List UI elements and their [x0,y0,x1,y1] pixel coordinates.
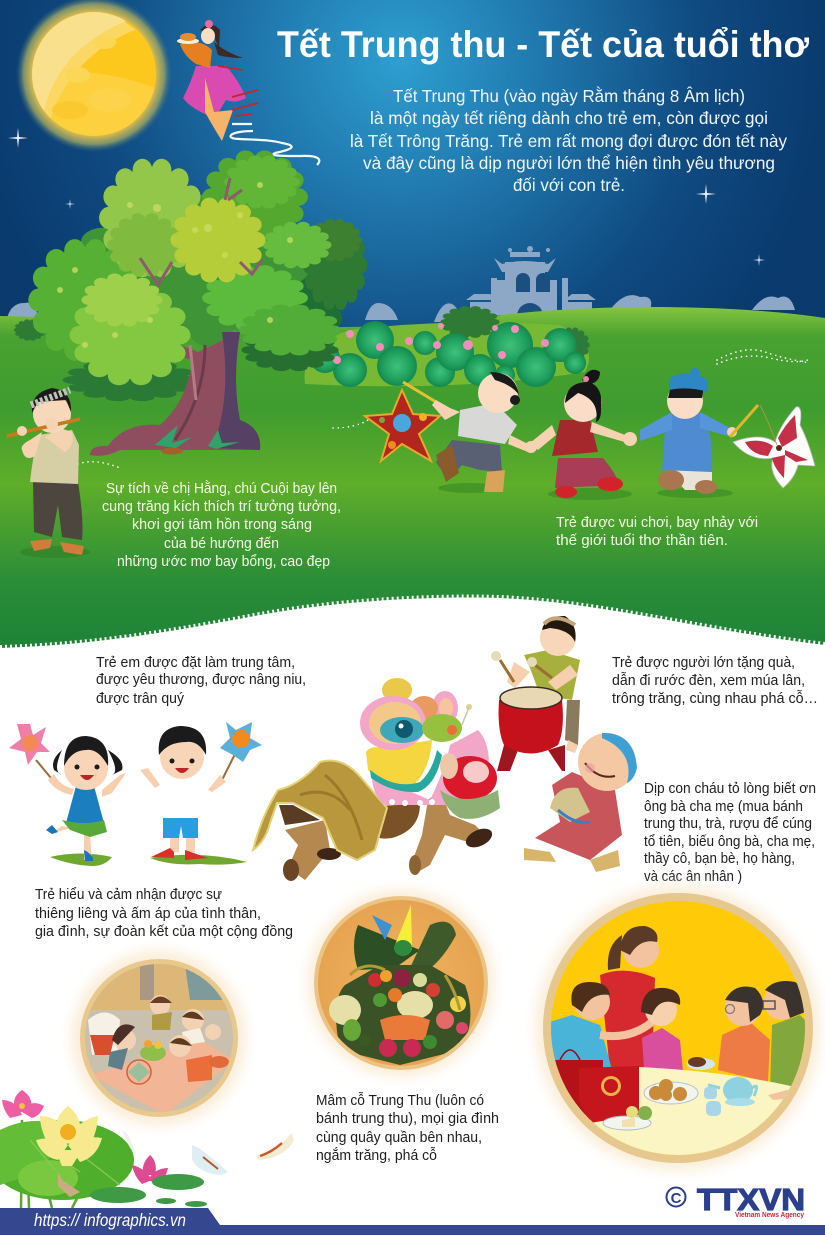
girl with pink lantern [9,724,126,866]
caption: gifts and lanterns: trông trăng, cùng nhau phá cỗ… [612,690,818,707]
caption: family warmth [35,887,293,940]
caption: children at the centre: Trẻ em được đặt làm trung tâm, [96,655,295,671]
boy in blue robe [640,368,758,498]
panel: green meadow [0,307,825,660]
intro text block: là một ngày tết riêng dành cho trẻ em, còn được gọi [370,108,768,128]
panel: night sky background [0,0,825,340]
illustration: big tree [14,150,367,456]
table [560,1067,791,1155]
caption: children at the centre: được yêu thương, được nâng niu, [96,672,306,688]
caption: fairy-tale imagination: Sự tích về chị Hằng, chú Cuội bay lên [106,480,337,497]
icon: Chang'e fairy flying [177,20,319,165]
father [550,982,612,1070]
caption: children at play: thế giới tuổi thơ thần tiên. [556,532,728,549]
caption: family warmth: thiêng liêng và ấm áp của tình thân, [35,906,261,922]
intro text block: Tết Trung Thu (vào ngày Rằm tháng 8 Âm lịch) [393,85,745,106]
caption: gratitude to elders: và các ân nhân ) [644,869,742,885]
caption: fairy-tale imagination: khơi gợi tâm hồn trong sáng [132,516,312,533]
caption: fairy-tale imagination [102,480,341,570]
caption: children at the centre: được trân quý [96,691,185,707]
caption: gratitude to elders [644,781,816,885]
grandmother [718,986,770,1082]
title: Tết Trung thu - Tết của tuổi thơ [277,24,810,65]
koi fish [58,1130,294,1197]
icon: full moon [16,0,172,152]
intro text block [350,85,787,195]
caption: children at play: Trẻ được vui chơi, bay nhảy với [556,514,758,531]
caption: Mid-Autumn feast [316,1092,499,1164]
circle image: children feasting [71,950,247,1126]
illustration: drum boy [491,616,580,771]
mother [600,926,659,1070]
illustration: lotus pond and koi fish [0,1090,294,1210]
pink lotus [2,1090,44,1118]
illustration: lion dance [253,678,500,881]
grandfather [762,981,805,1090]
illustration: lotus field [305,306,590,387]
circle image: Mid-Autumn fruit tray [307,889,495,1077]
logo: TTXVN copyright: Vietnam News Agency [735,1210,805,1219]
illustration: two cartoon kids with star lanterns [9,722,262,866]
caption: Mid-Autumn feast: ngắm trăng, phá cỗ [316,1147,437,1164]
lion head [360,678,500,819]
illustration: children holding hands [432,368,758,500]
caption: gifts and lanterns: dẫn đi rước đèn, xem múa lân, [612,672,805,689]
intro text block: là Tết Trông Trăng. Trẻ em rất mong đợi được đón tết này [350,131,787,151]
logo: TTXVN copyright: C [671,1190,682,1207]
caption: gratitude to elders: tổ tiên, biếu ông bà, cha mẹ, [644,834,815,850]
caption: gratitude to elders: Dịp con cháu tỏ lòng biết ơn [644,781,816,797]
caption: gratitude to elders: trung thu, trà, rượu để cúng [644,816,812,832]
caption: children at the centre [96,655,306,707]
gift bags [553,1050,639,1123]
caption: family warmth: Trẻ hiểu và cảm nhận được sự [35,887,222,903]
girl [641,988,683,1072]
yellow lotus [36,1106,102,1166]
decorative white dots [78,350,810,468]
circle image: family sharing mooncakes [535,885,821,1171]
footer band [0,1208,825,1235]
silhouette: temple and clouds [6,246,795,322]
panel: white lower section with grass edge [0,598,825,1236]
caption: family warmth: gia đình, sự đoàn kết của một cộng đồng [35,924,293,940]
caption: gifts and lanterns [612,655,818,707]
caption: gratitude to elders: thầy cô, bạn bè, họ hàng, [644,851,795,867]
caption: gratitude to elders: ông bà cha mẹ (mua bánh [644,799,803,815]
illustration: butterfly lantern [733,405,815,488]
tree trunk and roots [90,332,260,456]
caption: fairy-tale imagination: của bé hướng đến [164,535,279,552]
logo: TTXVN copyright [666,1182,805,1219]
illustration: star lantern [365,382,441,461]
caption: Mid-Autumn feast: cùng quây quần bên nhau, [316,1130,482,1146]
caption: gifts and lanterns: Trẻ được người lớn tặng quà, [612,655,795,671]
mooncakes and tea [603,1057,796,1130]
caption: fairy-tale imagination: những ước mơ bay bổng, cao đẹp [117,553,330,570]
girl in red [525,370,637,500]
boy in grey shirt [432,372,530,493]
illustration: monk boy with fan [524,733,637,872]
footer URL: https:// infographics.vn [34,1210,186,1230]
caption: children at play [556,514,758,549]
intro text block: và đây cũng là dịp người lớn thể hiện tình yêu thương [363,153,775,173]
caption: Mid-Autumn feast: Mâm cỗ Trung Thu (luôn có [316,1092,484,1109]
illustration: boy playing flute [7,388,90,558]
intro text block: đối với con trẻ. [513,175,625,195]
performers' legs [283,790,495,881]
logo: TTXVN copyright: TTXVN [697,1182,805,1217]
caption: Mid-Autumn feast: bánh trung thu), mọi gia đình [316,1111,499,1127]
boy with orange lantern [140,722,262,865]
cloth body [253,760,387,860]
icons: stars [8,128,765,266]
caption: fairy-tale imagination: cung trăng kích thích trí tưởng tưởng, [102,498,341,515]
